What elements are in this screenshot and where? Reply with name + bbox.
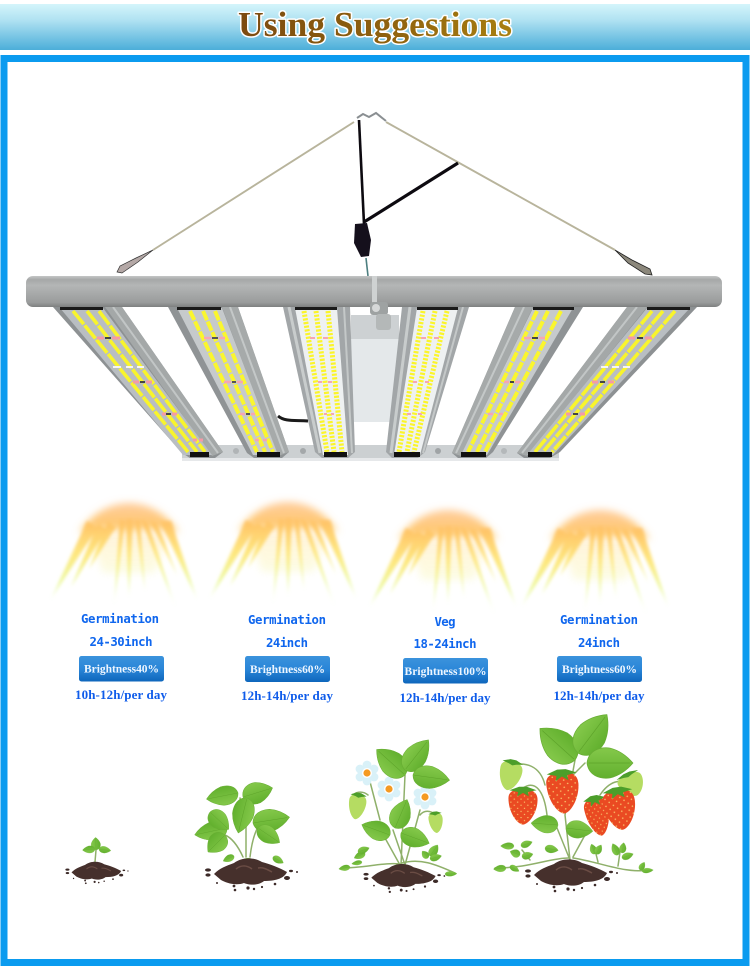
light rays <box>522 510 668 616</box>
plant: seedling <box>65 837 129 884</box>
light rays <box>51 503 197 609</box>
daily hours: 12h-14h/per day <box>554 688 645 703</box>
hanging distance: 18-24inch <box>414 637 476 651</box>
LED panel 1 <box>53 307 223 458</box>
brightness button: Brightness100% <box>404 666 486 678</box>
driver box and cable <box>278 315 399 422</box>
plant: young plant <box>193 778 298 891</box>
daily hours: 12h-14h/per day <box>400 690 491 705</box>
brightness button <box>403 658 488 684</box>
plant: flowering plant <box>338 733 457 893</box>
brightness button <box>245 656 330 682</box>
main horizontal bar <box>26 276 722 307</box>
brightness button: Brightness40% <box>84 664 159 676</box>
plant: fruiting plant <box>493 706 654 892</box>
light rays <box>370 510 516 616</box>
LED panel 3 <box>283 307 355 458</box>
brightness button <box>79 656 164 682</box>
stage label: Veg <box>434 615 456 629</box>
stage 3 column <box>370 510 516 705</box>
hanging distance: 24inch <box>578 636 620 650</box>
hanging distance: 24inch <box>266 636 308 650</box>
stage 4 column <box>522 510 668 703</box>
header banner <box>0 4 750 50</box>
stage 1 column <box>51 503 197 702</box>
brightness button: Brightness60% <box>250 664 325 676</box>
stage 2 column <box>210 502 356 703</box>
stage label: Germination <box>560 613 638 627</box>
LED grow light <box>26 113 722 461</box>
hanging distance: 24-30inch <box>90 635 152 649</box>
center clamp and knob <box>370 276 391 330</box>
LED panel 6 <box>517 307 697 458</box>
light rays <box>210 502 356 608</box>
LED panel 4 <box>386 307 469 458</box>
hanging wires <box>117 113 652 276</box>
LED panel 5 <box>452 307 583 458</box>
LED panel 2 <box>168 307 289 458</box>
daily hours: 12h-14h/per day <box>241 688 334 703</box>
bottom bracket <box>182 445 559 461</box>
daily hours: 10h-12h/per day <box>75 687 168 702</box>
stage label: Germination <box>248 613 326 627</box>
brightness button <box>557 656 642 682</box>
stage label: Germination <box>81 612 159 626</box>
title: Using Suggestions <box>238 5 512 44</box>
brightness button: Brightness60% <box>562 664 637 676</box>
